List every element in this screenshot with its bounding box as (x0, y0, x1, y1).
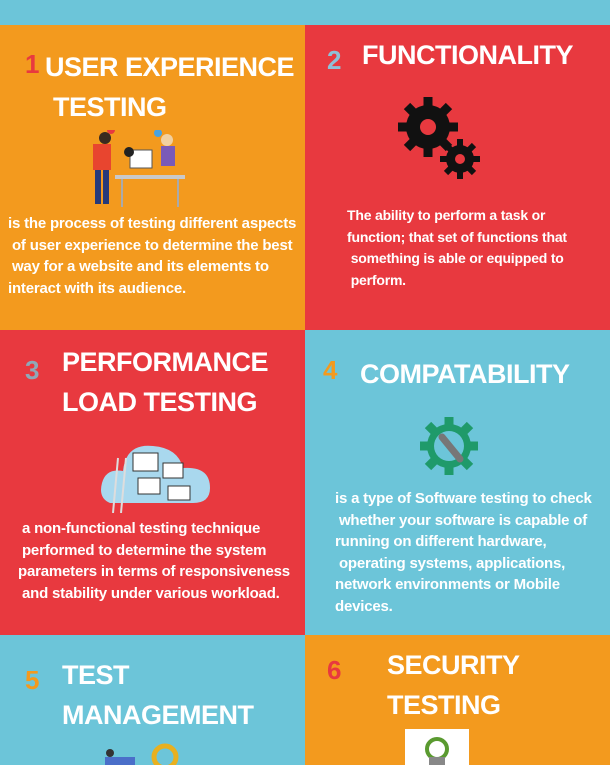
description: function; that set of functions that (347, 228, 567, 244)
description: interact with its audience. (8, 280, 186, 296)
icon: people at desk (93, 130, 185, 207)
description: is a type of Software testing to check (335, 490, 592, 507)
heading: COMPATABILITY (360, 359, 569, 389)
heading: TEST (62, 660, 129, 690)
description: devices. (335, 598, 393, 614)
panel: user experience testing (0, 25, 305, 330)
description: perform. (351, 272, 406, 288)
description (18, 520, 290, 602)
description (347, 207, 567, 288)
heading (62, 347, 268, 417)
number 2: 2 (327, 45, 341, 75)
description: The ability to perform a task or (347, 207, 545, 223)
number 5: 5 (25, 665, 39, 695)
heading (62, 660, 254, 730)
heading: PERFORMANCE (62, 347, 268, 377)
description: and stability under various workload. (22, 584, 280, 602)
panel: security testing (305, 635, 610, 765)
description: way for a website and its elements to (12, 258, 269, 275)
description: parameters in terms of responsiveness (18, 563, 290, 580)
description: network environments or Mobile (335, 576, 560, 593)
heading: MANAGEMENT (62, 700, 254, 730)
icon: team gears (105, 744, 178, 765)
panel: performance load testing (0, 330, 305, 635)
panel: compatability (305, 330, 610, 635)
number 4: 4 (323, 355, 337, 385)
description: performed to determine the system (22, 542, 266, 558)
description: something is able or equipped to (351, 250, 564, 266)
heading: SECURITY (387, 650, 520, 680)
heading: LOAD TESTING (62, 387, 257, 417)
icon: security badge (405, 729, 469, 765)
heading (45, 52, 294, 122)
heading: USER EXPERIENCE (45, 52, 294, 82)
description: running on different hardware, (335, 533, 547, 550)
number 1: 1 (25, 49, 39, 79)
icon: gear with wrench (420, 417, 478, 475)
panel: functionality (305, 25, 610, 330)
top strip (0, 0, 610, 25)
number 3: 3 (25, 355, 39, 385)
heading (387, 650, 520, 720)
description: a non-functional testing technique (22, 520, 260, 537)
description (335, 490, 592, 614)
panel: test management (0, 635, 305, 765)
heading: TESTING (53, 92, 167, 122)
number 6: 6 (327, 655, 341, 685)
description: of user experience to determine the best (12, 236, 292, 254)
description: whether your software is capable of (339, 512, 587, 528)
heading: FUNCTIONALITY (362, 40, 573, 70)
icon: cloud with laptops (101, 446, 210, 513)
description (8, 215, 296, 296)
heading: TESTING (387, 690, 501, 720)
description: is the process of testing different aspects (8, 215, 296, 232)
icon: gears (398, 97, 480, 179)
description: operating systems, applications, (339, 554, 565, 572)
